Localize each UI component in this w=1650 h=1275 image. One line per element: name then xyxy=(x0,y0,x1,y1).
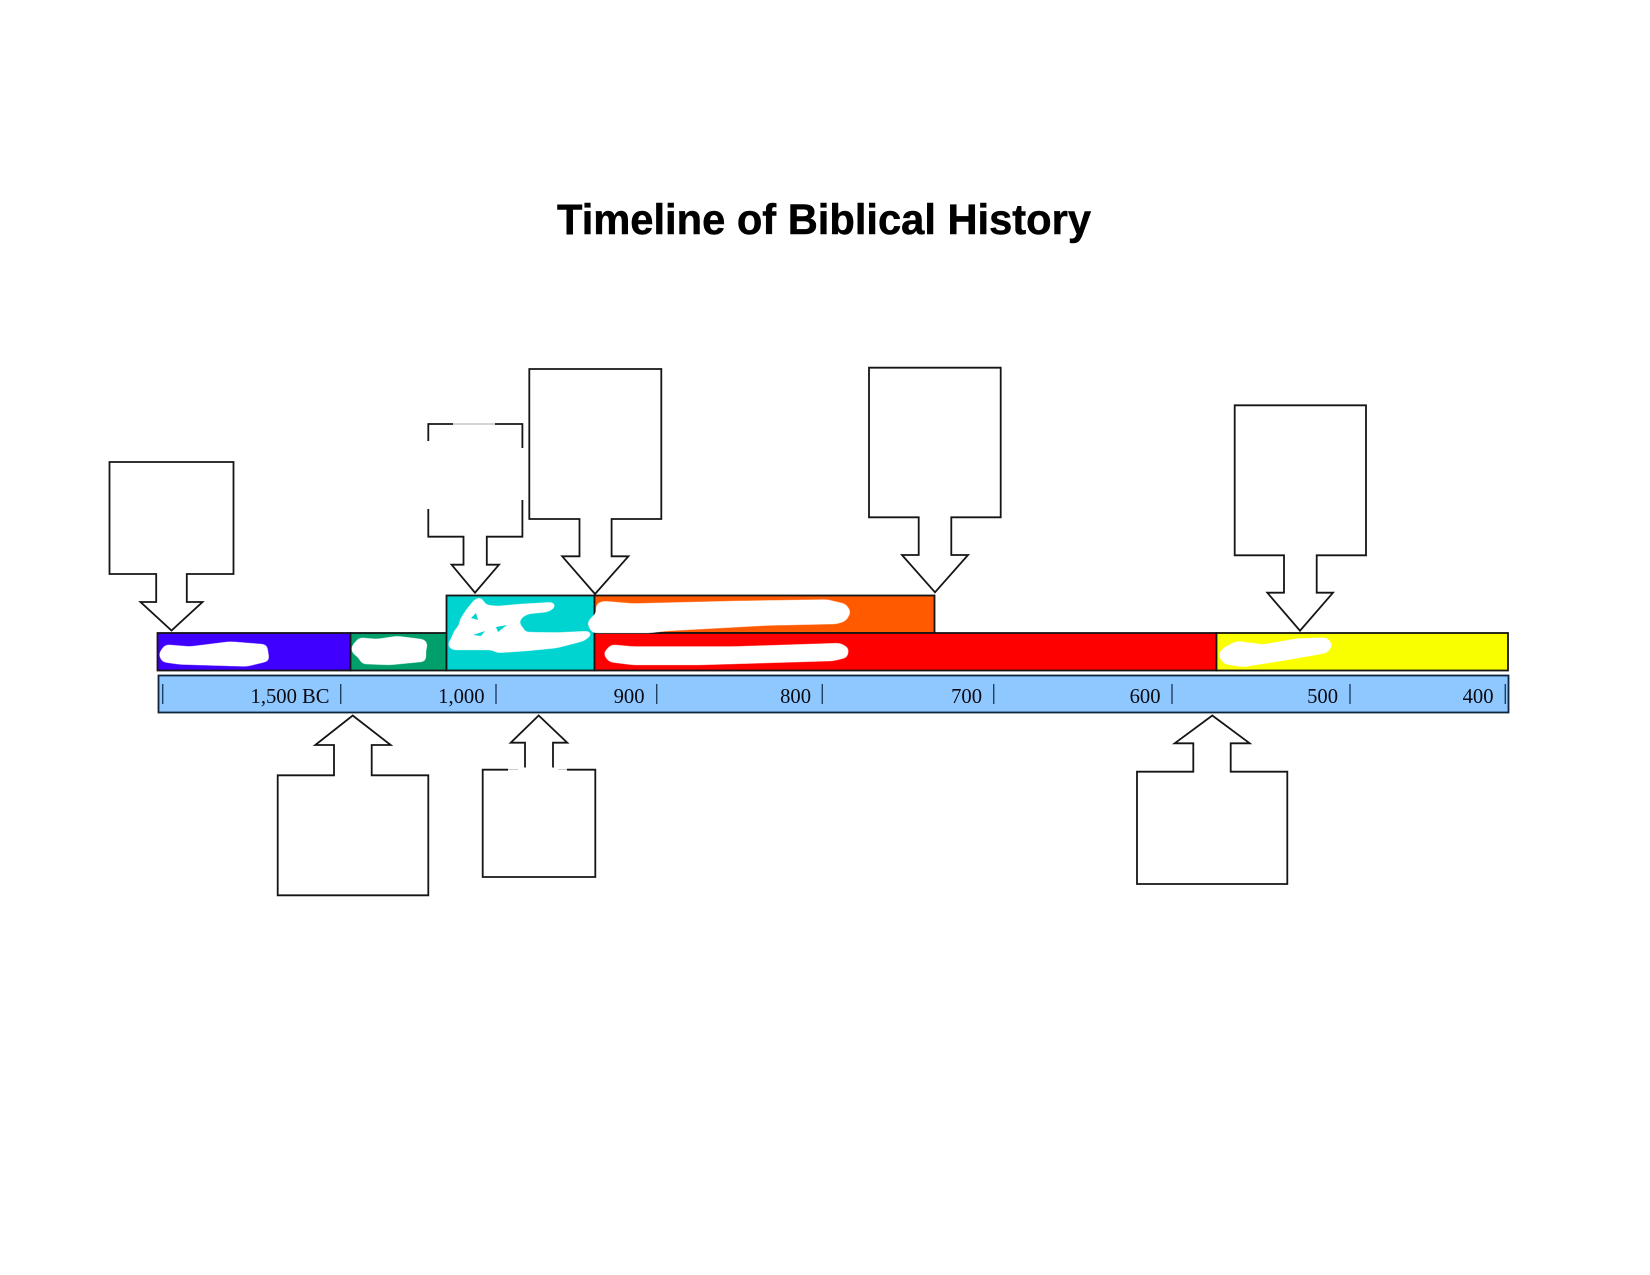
date labels: 800 xyxy=(780,686,811,708)
date labels: 700 xyxy=(951,686,982,708)
tick marks xyxy=(163,684,1505,704)
date labels: 1,500 BC xyxy=(251,686,330,708)
segment: red period xyxy=(594,633,1216,670)
segment: teal period xyxy=(446,596,594,670)
whited-out label: red xyxy=(603,643,849,665)
segment: purple period xyxy=(158,633,350,670)
segment: yellow period xyxy=(1216,633,1508,670)
date labels: 600 xyxy=(1130,686,1160,708)
whited-out label: teal xyxy=(447,597,593,653)
date labels xyxy=(251,686,1494,708)
date labels: 900 xyxy=(614,686,644,708)
callout arrow 1: blank box pointing down to purple period xyxy=(110,462,234,630)
title: Timeline of Biblical History xyxy=(557,197,1091,244)
date labels: 1,000 xyxy=(438,686,484,708)
callout arrow 8: blank box pointing up to axis after 600 xyxy=(1137,716,1287,884)
callout arrow 2: blank box pointing down to teal period xyxy=(426,422,525,593)
date labels: 400 xyxy=(1463,686,1494,708)
callout arrow 6: blank box pointing up to axis near 1,500 BC xyxy=(278,716,428,895)
date axis xyxy=(158,676,1508,712)
segment: green period xyxy=(350,633,446,670)
timeline period bars xyxy=(158,596,1508,670)
whited-out label: orange xyxy=(587,600,851,633)
callout arrow 7: blank box pointing up to axis after 1,000 xyxy=(483,716,595,877)
axis band xyxy=(158,676,1508,712)
date labels: 500 xyxy=(1307,686,1338,708)
whited-out label: green xyxy=(351,636,428,665)
whited-out label: yellow xyxy=(1218,638,1333,667)
callout arrow 3: blank box pointing down to teal and orange boundary xyxy=(529,369,661,594)
segment: orange period xyxy=(594,596,934,633)
callout arrow 5: blank box pointing down to yellow period xyxy=(1235,405,1366,631)
callout arrow 4: blank box pointing down to end of orange period xyxy=(869,368,1001,592)
whited-out label: purple xyxy=(158,642,270,666)
